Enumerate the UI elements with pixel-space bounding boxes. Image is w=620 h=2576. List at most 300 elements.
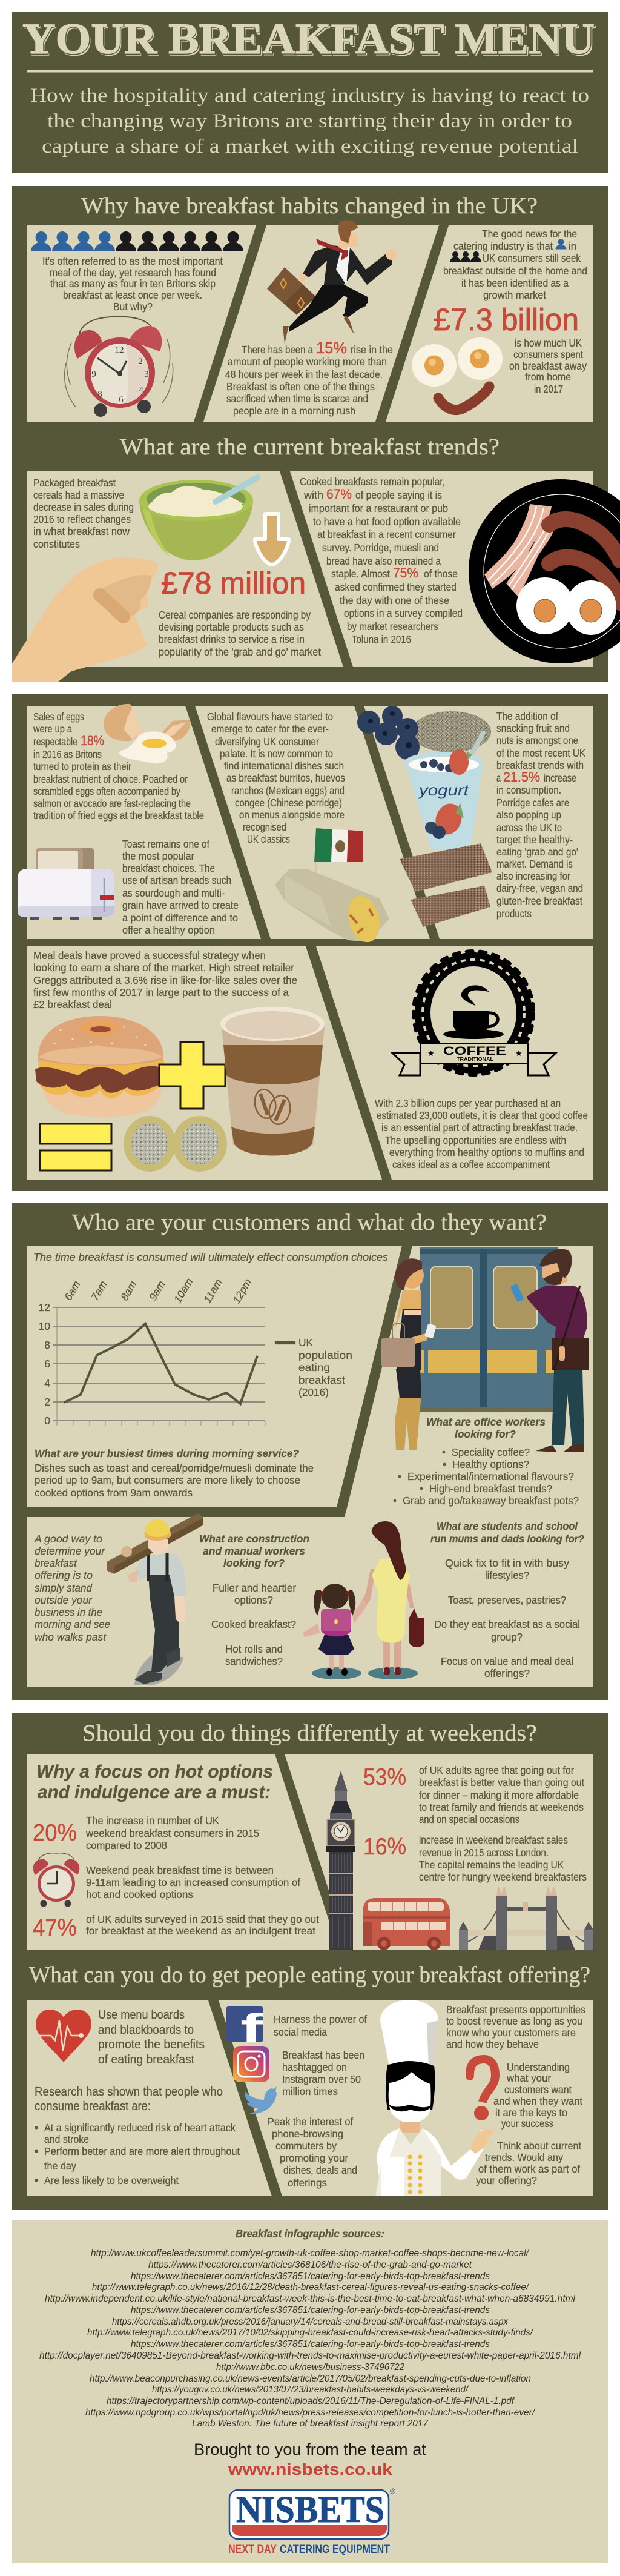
text: menu boards: and blackboards to [98, 2023, 194, 2037]
text: source list: http://docplayer.net/36409851-Beyond-breakfast-working-with-trends-to-maximise-productivity-a-eurest-white-paper-april-2016.html [39, 2351, 581, 2361]
stat: 16 percent: 16% [363, 1834, 406, 1860]
text: coffee: estimated 23,000 outlets, it is clear that good coffee [377, 1109, 588, 1121]
line chart: 6am [62, 1279, 82, 1303]
text: 15% rise [225, 339, 393, 417]
text: opportunities: to boost revenue as long as you [446, 2015, 582, 2027]
text: busiest times [35, 1447, 314, 1499]
stat: 16 percent: centre for hungry weekend breakfasters [419, 1871, 587, 1883]
title: YOUR BREAKFAST MENU [24, 16, 596, 65]
icon: cooked breakfast plate [469, 479, 620, 663]
text: a good way: A good way to [34, 1533, 102, 1545]
text: meal deals: £2 breakfast deal [33, 998, 112, 1011]
icon: Facebook [226, 2005, 263, 2051]
line chart: 0 [44, 1415, 50, 1427]
text: cooked breakfasts: the day with one of these [340, 594, 449, 606]
text: global flavours: ranchos (Mexican eggs) and [231, 785, 345, 797]
icon: hand holding bowl [12, 557, 158, 682]
icon: egg and sausage smile [412, 337, 503, 410]
stat: 7.3 billion: £7.3 billion [434, 302, 579, 337]
line chart [39, 1276, 265, 1427]
icon: cracked egg [104, 704, 190, 763]
text: menu boards: of eating breakfast [98, 2053, 194, 2066]
heading: current trends: What are the current breakfast trends? [120, 434, 500, 460]
icon: coffee badge [392, 951, 556, 1075]
text: phone browsing: promoting your [280, 2152, 348, 2164]
text: opportunities: Breakfast presents opportunities [446, 2003, 585, 2016]
text: a good way [34, 1533, 110, 1643]
text: toast: as sourdough and multi- [122, 887, 225, 899]
text: office workers: Speciality coffee? [452, 1446, 530, 1458]
logo: Nisbets: CATERING EQUIPMENT [280, 2543, 390, 2556]
text: hashtagged: hashtagged on [282, 2061, 347, 2073]
text: cereal decline: constitutes [33, 538, 80, 550]
text: good news: UK consumers still seek [483, 252, 581, 264]
text: cooked breakfasts: asked confirmed they started [335, 581, 457, 593]
text: source list: http://www.bbc.co.uk/news/business-37496722 [216, 2362, 404, 2372]
illustration: Tower Bridge [459, 1886, 593, 1950]
text: construction workers: sandwiches? [225, 1655, 283, 1667]
text: toast: breakfast choices. The [122, 862, 215, 874]
text: cooked breakfasts: important for a restaurant or pub [309, 502, 448, 514]
text: skip breakfast: that as many as four in ten Britons skip [50, 277, 216, 290]
text: understanding: it are the keys to [495, 2106, 567, 2119]
chart legend: UK [298, 1336, 313, 1349]
text: cooked breakfasts: bread have also remained a [326, 555, 441, 567]
text: eggs: were up a [33, 723, 72, 735]
text: cooked breakfasts: options in a survey compiled [344, 607, 463, 619]
text: cooked breakfasts: of those [424, 568, 458, 580]
text: snacking fruit: in consumption. [496, 784, 561, 796]
icon: toaster [18, 848, 114, 920]
text: office workers: High-end breakfast trends? [429, 1482, 552, 1495]
text: research benefits: At a significantly reduced risk of heart attack [44, 2122, 236, 2134]
icon: alarm clock: 6 [119, 395, 124, 405]
text: source list: https://www.thecaterer.com/articles/367851/catering-for-early-birds-top-breakfast-trends [131, 2305, 490, 2315]
icon: down arrow [255, 514, 289, 565]
text: coffee: everything from healthy options to muffins and [389, 1146, 584, 1158]
text: meal deals: Greggs attributed a 3.6% rise in like-for-like sales over the [33, 974, 297, 986]
text: toast: Toast remains one of [122, 838, 209, 850]
illustration: construction worker [107, 1513, 203, 1685]
text: weekend peak [86, 1864, 300, 1900]
text: cereal companies: Cereal companies are responding by [159, 609, 311, 621]
text: coffee: is an essential part of attracting breakfast trade. [381, 1121, 578, 1134]
text: good news: growth market [483, 289, 546, 301]
text: cooked breakfasts: at breakfast in a recent consumer [317, 528, 456, 540]
text: global flavours: find international dishes such [224, 760, 344, 772]
text: cooked breakfasts: staple. Almost [331, 568, 390, 580]
text: research benefits [35, 2085, 240, 2186]
text: global flavours: on menus alongside more [239, 809, 345, 821]
heading: why have habits changed: Why have breakfast habits changed in the UK? [81, 193, 538, 219]
text: a good way: who walks past [35, 1631, 107, 1643]
text: source list: http://www.independent.co.uk/life-style/national-breakfast-week-this-is-the-best-time-to-eat-breakfast-what-when-a6834991.html [45, 2294, 575, 2304]
text: eggs: 18% [81, 733, 104, 748]
icon: running businessman [267, 220, 397, 344]
text: cooked breakfasts: survey. Porridge, muesli and [322, 542, 439, 554]
icon: coffee badge: COFFEE [443, 1045, 506, 1058]
icon: alarm clock: 12 [115, 345, 124, 355]
icon: alarm clock: 8 [97, 390, 102, 399]
logo: Nisbets: NISBETS [236, 2489, 384, 2531]
text: global flavours: congee (Chinese porridge) [235, 797, 342, 809]
text: source list: https://www.thecaterer.com/articles/367851/catering-for-early-birds-top-breakfast-trends [131, 2339, 490, 2349]
text: research benefits: Are less likely to be overweight [44, 2174, 179, 2186]
text: source list: http://www.telegraph.co.uk/news/2016/12/28/death-breakfast-cereal-figures-reveal-us-eating-snacks-coffee/ [92, 2282, 529, 2292]
text: skip breakfast: meal of the day, yet research has found [50, 267, 216, 279]
stat: 78 million: £78 million [161, 566, 306, 600]
icon: two pound coins [124, 1116, 227, 1172]
icon: coffee badge: ★ [515, 1049, 523, 1058]
icon: alarm clock: 2 [138, 357, 143, 367]
text: phone browsing: phone-browsing [272, 2128, 343, 2140]
icon: equals sign [40, 1124, 111, 1170]
stat: 20 percent: The increase in number of UK [86, 1814, 219, 1827]
text: good news: it has been identified as a [461, 277, 569, 289]
text: current trends question: trends. Would any [485, 2151, 563, 2163]
title: YOUR BREAKFAST MENU [22, 15, 595, 63]
text: toast: grain have arrived to create [122, 899, 239, 911]
text: global flavours: palate. It is now common to [220, 748, 333, 760]
stat: 53 percent: for dinner – making it more affordable [419, 1789, 579, 1801]
text: snacking fruit: The addition of [496, 710, 558, 722]
text: cooked breakfasts: Cooked breakfasts remain popular, [300, 476, 445, 488]
logo: Nisbets [228, 2487, 395, 2556]
text: students and school run: Toast, preserves, pastries? [448, 1594, 566, 1606]
text: good news [443, 228, 587, 301]
stat: 53 percent: 53% [363, 1764, 406, 1790]
text: office workers [394, 1416, 579, 1507]
text: source list: https://trajectorypartnership.com/wp-content/uploads/2016/11/The-Deregulation-of-Life-FINAL-1.pdf [107, 2396, 515, 2406]
text: cereal decline: in what breakfast now [33, 525, 130, 537]
text: consumer spend: in 2017 [534, 383, 563, 395]
text: snacking fruit: eating 'grab and go' [496, 846, 578, 858]
text: cooked breakfasts: by market researchers [347, 620, 438, 632]
text: eggs: breakfast nutrient of choice. Poached or [33, 773, 188, 785]
text: construction workers: Cooked breakfast? [211, 1618, 296, 1630]
text: construction workers: Fuller and heartier [213, 1582, 296, 1594]
text: students and school run [430, 1520, 584, 1679]
text: snacking fruit: 21.5% [503, 769, 540, 785]
panel: why habits changed and current trends [12, 186, 608, 682]
text: a good way: offering is to [35, 1569, 93, 1581]
text: 15% rise: 15% [316, 339, 347, 357]
text: snacking fruit: gluten-free breakfast [496, 895, 582, 907]
icon: blueberries and seeds [357, 706, 491, 760]
text: phone browsing: dishes, deals and [283, 2164, 357, 2176]
text: meal deals: looking to earn a share of the market. High street retailer [33, 961, 294, 974]
text: phone browsing: offerings [288, 2177, 327, 2189]
text: coffee: With 2.3 billion cups per year purchased at an [375, 1097, 561, 1109]
text: skip breakfast [42, 255, 223, 313]
stat: 53 percent: and on special occasions [419, 1813, 519, 1825]
text: students and school run: What are students and school [437, 1520, 578, 1532]
logo: Nisbets: NEXT DAY [228, 2543, 277, 2556]
text: eggs: in 2016 as Britons [33, 748, 102, 760]
panel: customers [12, 1203, 608, 1700]
chart legend: breakfast [298, 1374, 345, 1386]
text: weekend peak: Weekend peak breakfast time is between [86, 1864, 274, 1876]
illustration: chef [375, 2000, 494, 2196]
illustration: Big Ben [326, 1771, 355, 1950]
text: busiest times: cooked options from 9am onwards [35, 1487, 193, 1499]
text: cooked breakfasts: 75% [393, 565, 418, 580]
heading: get people eating: What can you do to get people eating your breakfast offering? [29, 1962, 590, 1988]
text: students and school run: group? [491, 1631, 523, 1643]
text: snacking fruit: Porridge cafes are [496, 797, 569, 809]
line chart: 6 [44, 1358, 50, 1370]
text: eggs: tradition of fried eggs at the breakfast table [33, 809, 204, 822]
text: a good way: simply stand [35, 1582, 93, 1594]
icon: alarm clock: 9 [91, 370, 96, 379]
line chart: 8 [44, 1339, 50, 1351]
stat: 20 percent: weekend breakfast consumers in 2015 [85, 1827, 259, 1839]
stat: 47 percent: for breakfast at the weekend as an indulgent treat [86, 1925, 315, 1937]
line chart: 10am [171, 1276, 195, 1305]
stat: 47 percent [33, 1913, 319, 1941]
icon: alarm clock: 3 [144, 370, 149, 379]
subtitle: capture a share of a market with exciting revenue potential [42, 136, 578, 158]
text: snacking fruit: also popping up [496, 809, 561, 821]
text: cereal decline: cereals had a massive [33, 489, 124, 501]
text: phone browsing: commuters by [275, 2140, 337, 2152]
text: source list: https://www.thecaterer.com/articles/368106/the-rise-of-the-grab-and-go-market [148, 2260, 472, 2270]
text: understanding: what your [506, 2072, 551, 2084]
subtitle [30, 85, 589, 158]
text: skip breakfast: But why? [113, 300, 153, 313]
text: snacking fruit: breakfast trends with [496, 759, 584, 771]
text: skip breakfast: breakfast at least once per week. [63, 289, 202, 301]
stat: 20 percent: compared to 2008 [86, 1839, 167, 1851]
text: cooked breakfasts: to have a hot food option available [313, 516, 461, 528]
heading: hot options: Why a focus on hot options [36, 1762, 273, 1782]
text: meal deals [33, 949, 297, 1011]
icon: plus sign [159, 1042, 225, 1109]
text: cereal decline: decrease in sales during [33, 501, 134, 513]
heading: hot options [36, 1762, 273, 1802]
text: research benefits: Research has shown that people who [35, 2085, 223, 2099]
text: cereal companies: popularity of the 'grab and go' market [159, 646, 321, 658]
stat: 53 percent: breakfast is better value than going out [419, 1776, 584, 1788]
illustration: red bus [363, 1898, 450, 1950]
text: current trends question: Think about current [497, 2140, 581, 2152]
icon: porridge bowl [139, 477, 257, 560]
text: cooked breakfasts: with [303, 489, 323, 501]
text: cooked breakfasts [300, 476, 463, 645]
stat: 20 percent: 20% [33, 1820, 77, 1846]
text: good news: catering industry is that [453, 240, 553, 252]
text: current trends question: your offering? [476, 2174, 537, 2186]
icon: heart with ECG [36, 2010, 91, 2062]
text: a good way: morning and see [35, 1618, 110, 1630]
text: source list: Lamb Weston: The future of breakfast insight report 2017 [192, 2418, 429, 2429]
text: source list: https://www.thecaterer.com/articles/367851/catering-for-early-birds-top-breakfast-trends [131, 2271, 490, 2282]
text: 15% rise: There has been a [242, 344, 313, 356]
text: research benefits: and stroke [44, 2133, 89, 2145]
text: snacking fruit: market. Demand is [496, 858, 573, 870]
text: office workers: Healthy options? [452, 1458, 529, 1470]
text: snacking fruit: dairy-free, vegan and [496, 882, 583, 894]
icon: Twitter [245, 2086, 277, 2114]
logo: Nisbets: ® [390, 2487, 395, 2495]
text: skip breakfast: It's often referred to as the most important [42, 255, 223, 267]
text: good news: The good news for the [482, 228, 577, 240]
text: toast: a point of difference and to [122, 912, 238, 924]
text: global flavours [207, 711, 345, 845]
text: toast: offer a healthy option [122, 924, 215, 936]
text: students and school run: offerings? [484, 1667, 530, 1679]
text: eggs: scrambled eggs often accompanied by [33, 785, 180, 797]
text: consumer spend: from home [525, 371, 571, 383]
icon: breakfast bun [35, 1016, 165, 1117]
text: construction workers: options? [234, 1594, 273, 1606]
text: opportunities: know who your customers are [446, 2027, 576, 2039]
chart legend: eating [298, 1361, 330, 1373]
stat: 53 percent: to treat family and friends at weekends [419, 1801, 584, 1813]
text: office workers: looking for? [455, 1428, 516, 1440]
text: understanding: customers want [504, 2083, 572, 2096]
text: students and school run: Quick fix to fit in with busy [445, 1557, 569, 1569]
icon: granola bars [400, 843, 492, 927]
text: understanding: Understanding [507, 2061, 570, 2073]
text: meal deals: first few months of 2017 in large part to the success of a [33, 986, 289, 998]
text: consumer spend: on breakfast away [509, 360, 587, 372]
heading: hot options: and indulgence are a must: [38, 1782, 271, 1802]
text: good news: breakfast outside of the home and [443, 265, 587, 277]
text: global flavours: emerge to cater for the ever- [211, 723, 329, 735]
text: a good way: business in the [35, 1606, 102, 1618]
line chart: 7am [88, 1279, 109, 1303]
text: understanding: and when they want [493, 2095, 582, 2107]
stat: 16 percent: increase in weekend breakfast sales [419, 1834, 568, 1846]
text: 15% rise: amount of people working more than [228, 356, 387, 368]
text: cereal decline: Packaged breakfast [33, 477, 116, 489]
text: meal deals: Meal deals have proved a successful strategy when [33, 949, 266, 961]
text: global flavours: UK classics [247, 833, 290, 845]
text: social media: social media [274, 2026, 327, 2038]
icon: yogurt pot [404, 733, 483, 849]
text: toast [122, 838, 239, 936]
text: research benefits: the day [44, 2160, 76, 2172]
text: 15% rise: 48 hours per week in the last decade. [225, 368, 383, 380]
icon: small alarm clock [33, 1853, 79, 1907]
text: consumer spend: consumers spent [513, 348, 583, 360]
text: toast: use of artisan breads such [122, 874, 231, 886]
text: brought to you: Brought to you from the team at [194, 2440, 427, 2458]
illustration: mother and child [303, 1521, 424, 1679]
text: snacking fruit: a [496, 772, 501, 784]
text: research benefits: consume breakfast are: [35, 2100, 151, 2113]
text: office workers: Experimental/international flavours? [407, 1470, 574, 1482]
line chart: 8am [118, 1279, 139, 1303]
icon: coffee badge: ★ [427, 1049, 435, 1058]
text: cereal companies: devising portable products such as [159, 621, 304, 633]
text: 15% rise: Breakfast is often one of the things [226, 380, 375, 393]
text: hashtagged: Breakfast has been [282, 2049, 364, 2061]
text: snacking fruit: also increasing for [496, 870, 570, 882]
text: social media: Harness the power of [274, 2013, 367, 2025]
stat: 16 percent: The capital remains the leading UK [419, 1859, 564, 1871]
line chart: 4 [44, 1377, 50, 1389]
text: coffee: cakes ideal as a coffee accompaniment [392, 1158, 550, 1170]
panel: sources and credits [12, 2220, 608, 2563]
stat: 53 percent [363, 1764, 584, 1825]
text: cereal companies: breakfast drinks to service a rise in [159, 633, 305, 645]
text: social media [274, 2013, 367, 2038]
chart legend: population [298, 1349, 352, 1361]
text: understanding [493, 2061, 582, 2130]
text: research benefits: Perform better and are more alert throughout [44, 2145, 240, 2157]
heading: weekends: Should you do things differently at weekends? [82, 1721, 537, 1746]
icon: question mark [466, 2059, 495, 2120]
text: current trends question [476, 2140, 581, 2186]
chart legend: (2016) [298, 1386, 329, 1398]
text: cooked breakfasts: 67% [326, 486, 352, 502]
text: global flavours: recognised [243, 821, 286, 833]
illustration: woman commuter [381, 1258, 437, 1450]
text: opportunities [446, 2003, 585, 2050]
stat: 47 percent: of UK adults surveyed in 2015 said that they go out [86, 1913, 319, 1925]
icon: takeaway coffee cup [220, 1007, 325, 1156]
text: hashtagged: Instagram over 50 [282, 2073, 361, 2085]
text: hashtagged: million times [282, 2085, 338, 2097]
line chart: 12pm [230, 1276, 254, 1306]
text: construction workers: and manual workers [203, 1545, 305, 1557]
text: 15% rise: rise in the [351, 344, 393, 356]
text: students and school run: Do they eat breakfast as a social [434, 1618, 580, 1630]
text: phone browsing: Peak the interest of [268, 2116, 353, 2128]
text: snacking fruit: across the UK to [496, 822, 562, 834]
text: construction workers: Hot rolls and [225, 1643, 283, 1655]
text: snacking fruit [496, 710, 585, 920]
line chart: 10 [39, 1320, 50, 1332]
text: students and school run: lifestyles? [485, 1569, 529, 1581]
text: opportunities: and how they behave [446, 2038, 539, 2050]
text: cooked breakfasts: of people saying it is [355, 489, 442, 501]
text: snacking fruit: products [496, 908, 532, 920]
subtitle: the changing way Britons are starting their day in order to [47, 110, 572, 132]
illustration: train doors [419, 1247, 558, 1412]
text: students and school run: run mums and dads looking for? [430, 1533, 584, 1545]
text: eggs: turned to protein as their [33, 760, 131, 772]
text: global flavours: as breakfast burritos, huevos [226, 772, 345, 784]
text: weekend peak: 9-11am leading to an increased consumption of [86, 1876, 300, 1888]
text: snacking fruit: nuts is amongst one [496, 734, 578, 746]
text: snacking fruit: target the healthy- [496, 834, 573, 846]
text: construction workers [199, 1533, 309, 1667]
panel: header [12, 12, 608, 173]
line chart: 11am [201, 1276, 225, 1305]
text: source list: https://yougov.co.uk/news/2013/07/23/breakfast-habits-weekdays-vs-weekend/ [152, 2385, 469, 2395]
text: students and school run: Focus on value and meal deal [441, 1655, 573, 1667]
icon: alarm clock: 4 [139, 385, 143, 395]
line chart: 2 [44, 1396, 50, 1408]
text: 15% rise: people are in a morning rush [233, 405, 355, 417]
text: cooked breakfasts: Toluna in 2016 [352, 633, 411, 645]
text: menu boards [98, 2008, 205, 2066]
text: cereal companies [159, 609, 321, 658]
text: source list: http://www.beaconpurchasing.co.uk/news-events/article/2017/05/02/breakfast-spending-cuts-due-to-inflation [90, 2374, 531, 2384]
text: a good way: breakfast [35, 1557, 78, 1569]
text: phone browsing [268, 2116, 357, 2189]
text: source list: https://cereals.ahdb.org.uk/press/2016/january/14/cereals-and-bread-still-breakfast-mainstays.aspx [112, 2317, 509, 2327]
text: snacking fruit: of the most recent UK [496, 747, 585, 759]
heading: sources: Breakfast infographic sources: [236, 2228, 384, 2240]
text: source list: https://www.npdgroup.co.uk/wps/portal/npd/uk/news/press-releases/competition-for-lunch-is-hotter-than-ever/ [85, 2408, 535, 2418]
illustration: man commuter [510, 1249, 589, 1452]
text: global flavours: diversifying UK consumer [215, 735, 319, 748]
stat: 47 percent: 47% [33, 1915, 77, 1941]
